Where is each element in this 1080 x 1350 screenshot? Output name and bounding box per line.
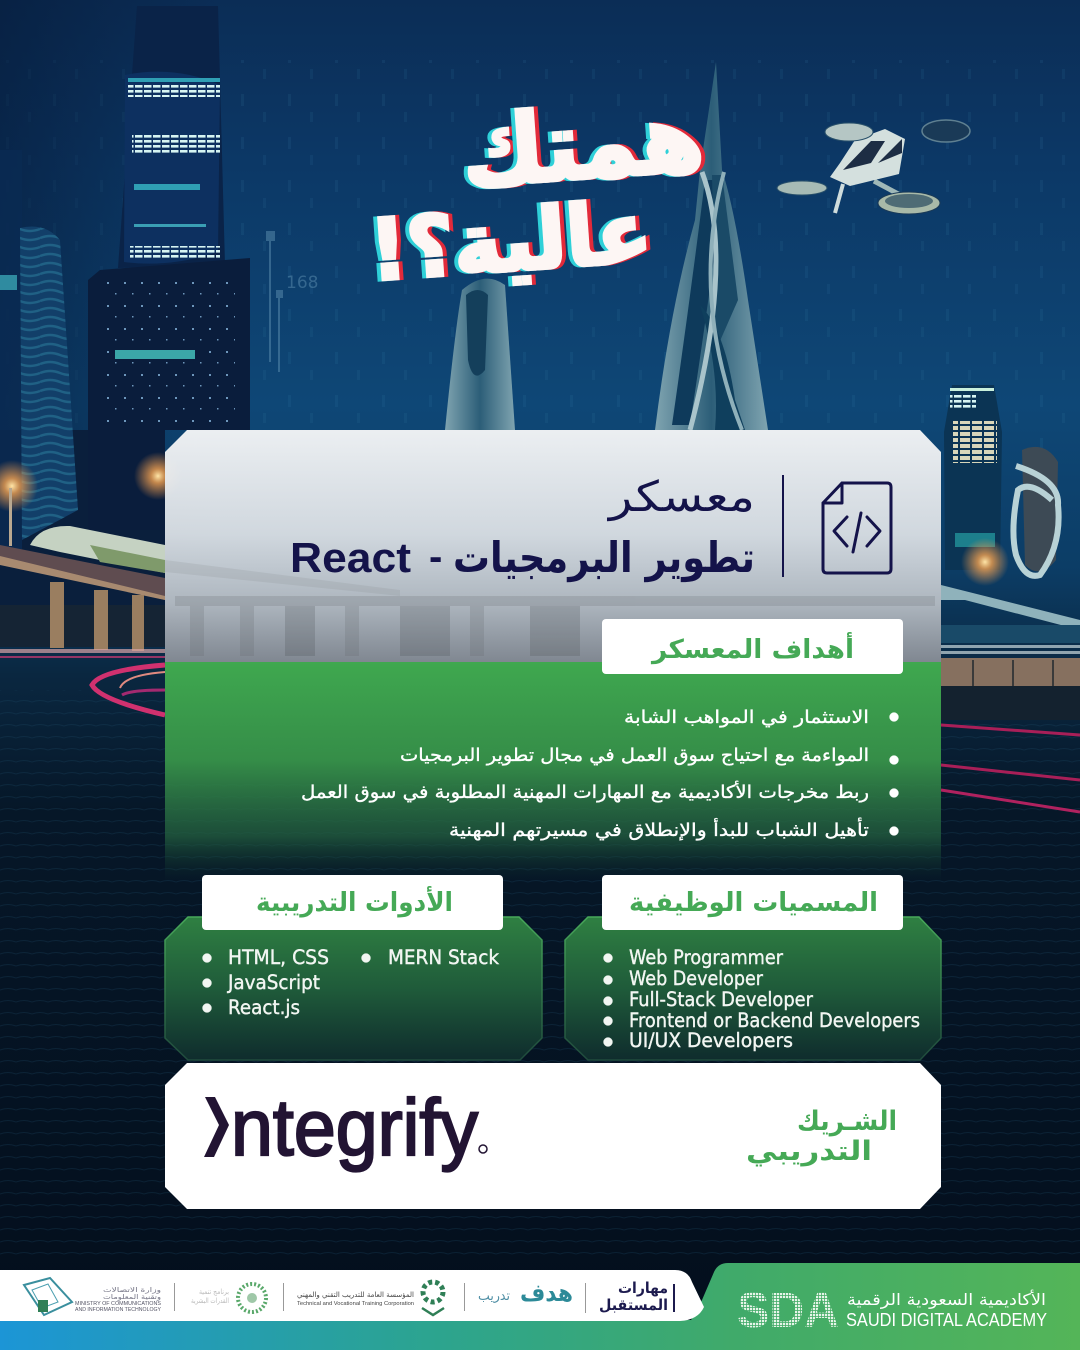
job titles label: [602, 875, 903, 930]
logo: ministry: وتقنية المعلومات: [103, 1293, 161, 1301]
job titles list: Frontend or Backend Developers: [629, 1009, 920, 1032]
logo: TVTC: المؤسسة العامة للتدريب التقني والمهني: [297, 1291, 414, 1299]
logo: SDA: [737, 1282, 1047, 1338]
city ghost through glass: [165, 560, 935, 656]
logo: national strategy: برنامج تنمية: [199, 1288, 229, 1296]
objectives label: أهداف المعسكر: [650, 632, 854, 665]
bootcamp heading: [290, 472, 755, 583]
objectives list: ربط مخرجات الأكاديمية مع المهارات المهنية المطلوبة في سوق العمل: [301, 781, 869, 803]
faint data poles: [266, 231, 318, 372]
logo: future skills: المستقبل: [599, 1296, 668, 1314]
bootcamp heading: تطوير البرمجيات: [453, 533, 755, 583]
job titles list: Web Programmer: [629, 946, 784, 969]
light trails: [0, 651, 1080, 812]
tools label: [202, 875, 503, 930]
panel: objectives green area: [165, 662, 941, 880]
logo: Hadaf and Tadreeb: [478, 1279, 573, 1307]
partner label: التدريبي: [746, 1136, 872, 1167]
footer: white logos strip: [0, 1270, 704, 1321]
academy name: الأكاديمية السعودية الرقمية: [847, 1289, 1046, 1310]
job titles label: المسميات الوظيفية: [629, 888, 878, 918]
heading line 1: همتك: [458, 81, 707, 209]
heading line 2: عالية؟!: [367, 183, 655, 300]
heading line 1: همتك: [454, 81, 703, 210]
job titles list: Full-Stack Developer: [629, 988, 814, 1011]
tools list: HTML, CSS: [228, 946, 329, 969]
logo: TVTC: [297, 1282, 444, 1315]
partner label: [746, 1106, 897, 1167]
right stadium and railing: [941, 585, 1080, 720]
heading line 2: عالية؟!: [371, 182, 659, 300]
job titles list: UI/UX Developers: [629, 1029, 793, 1052]
objectives list: [301, 707, 898, 841]
panel: training tools: [165, 875, 542, 1060]
job titles list: [604, 946, 920, 1052]
monorail train and bridge: [0, 452, 182, 651]
objectives list: تأهيل الشباب للبدأ والإنطلاق في مسيرتهم المهنية: [449, 817, 869, 841]
logo: ministry: [24, 1278, 162, 1315]
tools list: MERN Stack: [388, 946, 500, 969]
tower: small twisted skyscraper: [445, 279, 515, 430]
flying taxi drone: [777, 120, 970, 214]
tools list: [202, 946, 500, 1019]
panel: main glass card: [165, 430, 941, 880]
bootcamp heading: -: [429, 535, 442, 579]
heading line 1: همتك: [462, 81, 711, 209]
logo: future skills: [599, 1279, 675, 1314]
logo: SDA: SDA: [737, 1282, 839, 1338]
divider line: [782, 475, 784, 577]
faint data poles: 168: [286, 273, 318, 293]
tower: central glass tower: [118, 6, 225, 268]
icon: code file: [823, 483, 891, 573]
heading line 2: عالية؟!: [363, 183, 651, 300]
bootcamp heading: معسكر: [607, 472, 755, 521]
logo: Hadaf and Tadreeb: تدريب: [478, 1289, 510, 1304]
academy name: [846, 1289, 1047, 1330]
right building with lit top: [944, 385, 1009, 586]
twisted tower right: [1013, 447, 1059, 576]
objectives label: [602, 619, 903, 674]
tower: dark block: [88, 258, 250, 530]
logo: ministry: MINISTRY OF COMMUNICATIONS: [75, 1301, 162, 1307]
tower: left striped: [0, 150, 78, 560]
footer: green academy tab: [690, 1263, 1080, 1350]
panel: training partner: [165, 1063, 941, 1209]
tools label: الأدوات التدريبية: [256, 886, 453, 918]
objectives list: الاستثمار في المواهب الشابة: [624, 707, 869, 728]
logo: Integrify: ntegrify: [231, 1083, 478, 1172]
logo: national strategy: [191, 1284, 266, 1312]
logo: future skills: مهارات: [618, 1279, 668, 1297]
logo: Hadaf and Tadreeb: هدف: [520, 1279, 573, 1307]
footer bar: [0, 1263, 1080, 1350]
logo: TVTC: Technical and Vocational Training Corporation: [297, 1301, 414, 1307]
tower: twisted skyscraper: [655, 62, 768, 430]
bootcamp heading: React: [290, 534, 411, 581]
logo: ministry: AND INFORMATION TECHNOLOGY: [75, 1307, 162, 1313]
title: glitch headline: [363, 81, 711, 300]
tools list: React.js: [228, 996, 300, 1019]
partner label: الشـريك: [797, 1106, 897, 1137]
job titles list: Web Developer: [629, 967, 764, 990]
panel: job titles: [565, 875, 941, 1060]
objectives list: المواءمة مع احتياج سوق العمل في مجال تطوير البرمجيات: [400, 745, 869, 766]
logo: national strategy: القدرات البشرية: [191, 1297, 229, 1305]
academy name: SAUDI DIGITAL ACADEMY: [846, 1310, 1047, 1330]
logo: ministry: وزارة الاتصالات: [103, 1286, 161, 1294]
tools list: JavaScript: [226, 971, 320, 994]
